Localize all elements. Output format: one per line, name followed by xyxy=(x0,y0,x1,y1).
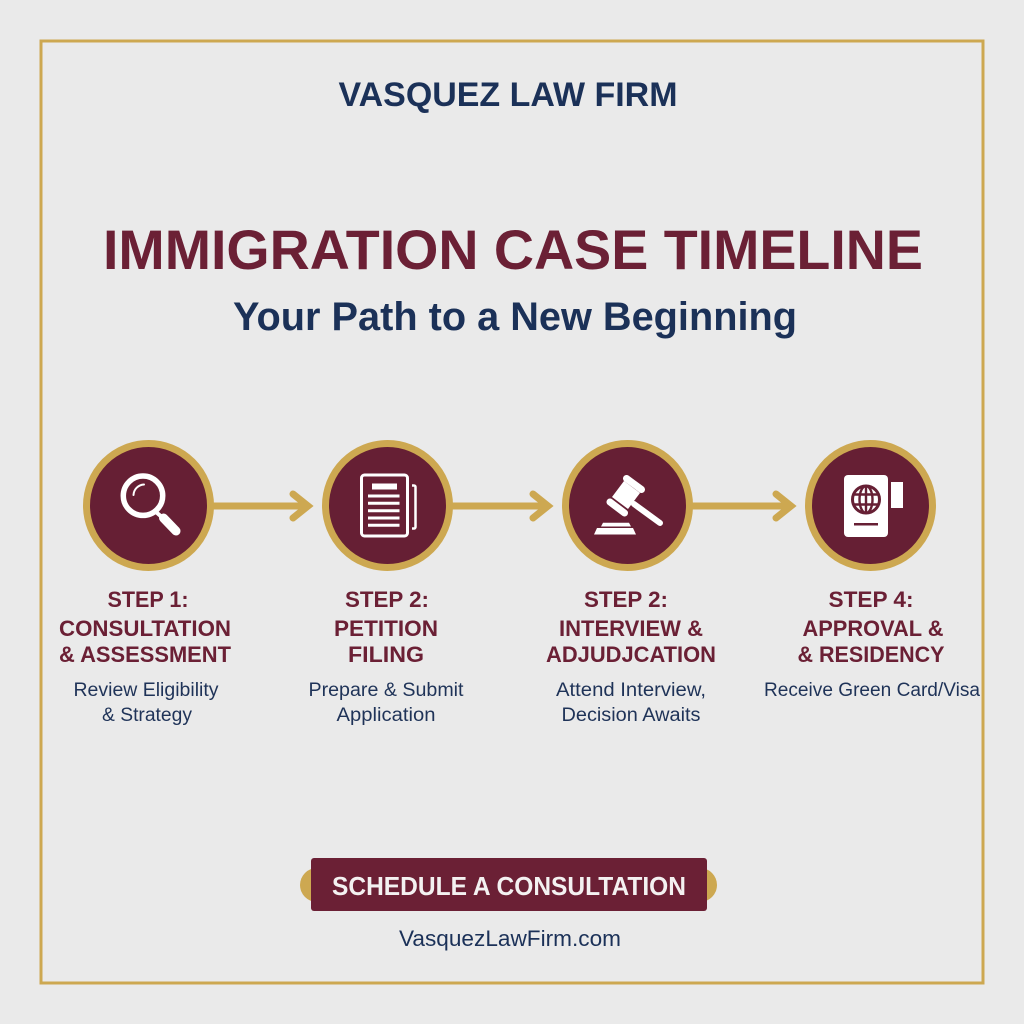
step 4 text: & RESIDENCY xyxy=(798,642,945,667)
arrow: step 3 to 4 xyxy=(691,494,791,518)
arrow: step 2 to 3 xyxy=(451,494,548,518)
step 3 icon: gavel xyxy=(566,444,690,568)
step 4 text: APPROVAL & xyxy=(802,616,944,641)
step 3 text: Decision Awaits xyxy=(562,705,700,726)
step 1 text: Review Eligibility xyxy=(74,680,219,701)
step 2 text: PETITION xyxy=(334,616,438,641)
call to action button: SCHEDULE A CONSULTATION xyxy=(332,871,686,901)
step 2 icon: document xyxy=(326,444,450,568)
step 4 icon: passport xyxy=(808,444,932,568)
step 4 text xyxy=(764,587,980,701)
step 3 text xyxy=(546,587,716,726)
step 1 text: & ASSESSMENT xyxy=(59,642,232,667)
step 2 text xyxy=(308,587,464,726)
step 2 text: Prepare & Submit xyxy=(308,680,464,701)
firm name: VASQUEZ LAW FIRM xyxy=(338,76,678,114)
step 3 text: INTERVIEW & xyxy=(559,616,703,641)
call to action button xyxy=(300,858,717,911)
step 1 text: STEP 1: xyxy=(108,587,188,612)
step 4 text: STEP 4: xyxy=(828,587,914,612)
website url: VasquezLawFirm.com xyxy=(399,926,621,951)
arrow: step 1 to 2 xyxy=(212,494,308,518)
step 2 text: FILING xyxy=(348,642,424,667)
step 2 text: STEP 2: xyxy=(345,587,429,612)
step 4 text: Receive Green Card/Visa xyxy=(764,680,980,701)
step 1 text: CONSULTATION xyxy=(59,616,231,641)
step 1 text xyxy=(59,587,232,726)
step 1 icon: magnifying glass xyxy=(86,444,210,568)
step 1 text: & Strategy xyxy=(102,705,192,726)
step 3 text: ADJUDJCATION xyxy=(546,642,716,667)
step 3 text: STEP 2: xyxy=(584,587,668,612)
step 2 text: Application xyxy=(336,705,436,726)
subtitle: Your Path to a New Beginning xyxy=(233,295,797,339)
main title: IMMIGRATION CASE TIMELINE xyxy=(103,218,923,281)
step 3 text: Attend Interview, xyxy=(556,680,706,701)
